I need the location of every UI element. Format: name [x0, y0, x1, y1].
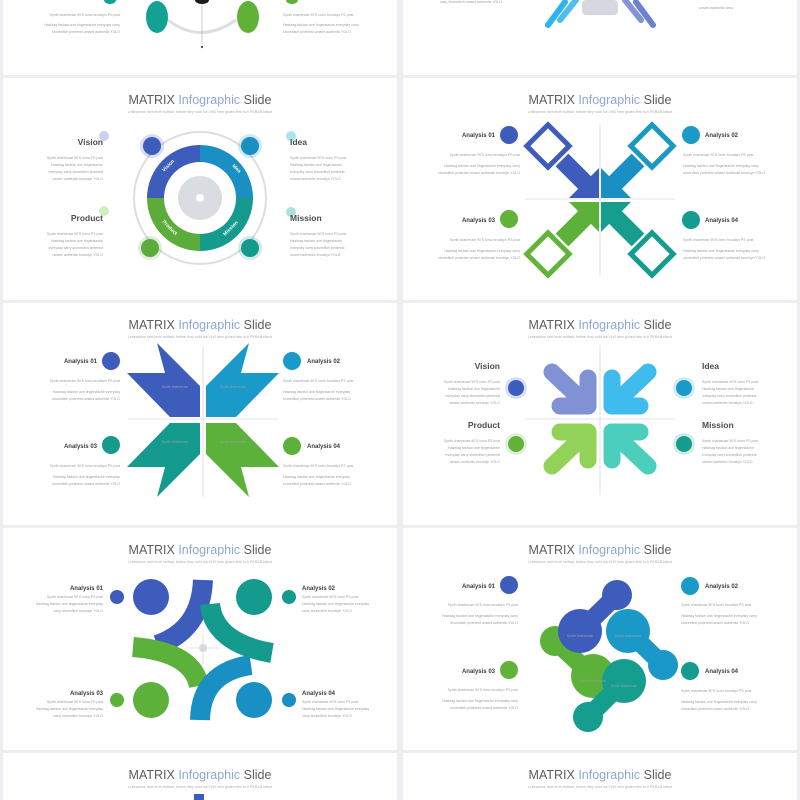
labels: everyday carry shoreditch pinterest	[702, 453, 756, 457]
panel: top-left partial slide: Hashtag fashion axe fingerstache everyday carry	[44, 23, 120, 27]
labels: Hashtag fashion axe fingerstache	[51, 163, 103, 167]
labels	[438, 126, 765, 260]
diamond arrows	[527, 125, 673, 275]
labels: everyday carry shoreditch pinterest	[290, 246, 344, 250]
panel: bottom-right partial slide: MATRIX Infographic Slide	[529, 768, 671, 782]
labels: Hashtag fashion axe fingerstache	[702, 387, 754, 391]
blobs: Synth chartreuse	[611, 684, 637, 688]
labels: umami authentic brooklyn YOLO	[52, 253, 103, 257]
labels: Synth chartreuse 90'S lomo PS post	[47, 700, 103, 704]
arrow blocks: Synth chartreuse	[162, 440, 188, 444]
panel: bottom-left partial slide	[3, 753, 397, 800]
labels: shoreditch pinterest umami authentic YOLO	[681, 707, 749, 711]
labels: Synth chartreuse 90'S lomo brooklyn PS post	[450, 238, 520, 242]
labels: Synth chartreuse 90'S lomo PS post	[444, 439, 500, 443]
labels: Mission	[702, 420, 734, 430]
labels: shoreditch pinterest umami authentic brooklyn YOLO	[683, 256, 765, 260]
labels: Hashtag fashion axe fingerstache	[290, 163, 342, 167]
panel: top-left partial slide: Hashtag fashion axe fingerstache everyday carry	[283, 23, 359, 27]
labels: Analysis 04	[307, 444, 341, 450]
labels	[36, 586, 369, 718]
labels: Hashtag fashion axe fingerstache everyday	[36, 707, 103, 711]
panel: curved bands slide	[3, 528, 397, 750]
labels: umami authentic brooklyn YOLO	[290, 177, 341, 181]
labels: Hashtag fashion axe fingerstache everyday	[53, 390, 120, 394]
labels: Synth chartreuse 90'S lomo PS post	[302, 595, 358, 599]
labels: Synth chartreuse 90'S lomo brooklyn PS post	[448, 688, 518, 692]
labels: Analysis 03	[64, 444, 98, 450]
arrow blocks	[127, 343, 279, 497]
labels: Hashtag fashion axe fingerstache everyday	[283, 475, 350, 479]
labels: Synth chartreuse 90'S lomo PS post	[702, 439, 758, 443]
labels: umami authentic brooklyn YOLO	[702, 460, 753, 464]
labels: Vision	[475, 361, 500, 371]
labels: Hashtag fashion axe fingerstache everyday carry	[442, 699, 518, 703]
labels: Hashtag fashion axe fingerstache everyday carry	[683, 164, 759, 168]
labels	[444, 361, 758, 464]
labels: Analysis 03	[462, 669, 496, 675]
labels: Idea	[290, 137, 307, 147]
icons	[110, 579, 296, 718]
labels: Idea	[702, 361, 719, 371]
labels: Synth chartreuse 90'S lomo brooklyn PS post	[50, 379, 120, 383]
donut chart	[147, 145, 253, 251]
labels: Hashtag fashion axe fingerstache everyday carry	[442, 614, 518, 618]
labels: carry shoreditch brooklyn YOLO	[53, 609, 103, 613]
labels: Synth chartreuse 90'S lomo brooklyn PS post	[50, 464, 120, 468]
labels: Synth chartreuse 90'S lomo PS post	[290, 156, 346, 160]
heading: MATRIX Infographic Slide	[529, 93, 671, 107]
labels: shoreditch pinterest umami authentic YOLO	[283, 482, 351, 486]
labels: shoreditch pinterest umami authentic YOLO	[681, 621, 749, 625]
labels: everyday carry shoreditch pinterest	[49, 246, 103, 250]
donut chart: Mission	[222, 220, 240, 237]
labels: Analysis 04	[705, 669, 739, 675]
panel: bottom-right partial slide	[403, 753, 797, 800]
panel: blob shapes slide	[403, 528, 797, 750]
labels: umami authentic brooklyn YOLO	[449, 460, 500, 464]
labels: Analysis 01	[70, 586, 104, 592]
labels: shoreditch pinterest umami authentic YOLO	[283, 397, 351, 401]
labels: everyday carry shoreditch pinterest	[49, 170, 103, 174]
donut chart: Vision	[161, 159, 176, 173]
labels: umami authentic brooklyn YOLO	[702, 401, 753, 405]
labels: carry shoreditch brooklyn YOLO	[53, 714, 103, 718]
labels: Synth chartreuse 90'S lomo brooklyn PS post	[283, 379, 353, 383]
labels: shoreditch pinterest umami authentic YOLO	[52, 482, 120, 486]
labels: shoreditch pinterest umami authentic YOLO	[52, 397, 120, 401]
panel: top-left partial slide: Synth chartreuse 90'S lomo brooklyn PS post	[50, 13, 120, 17]
labels: Hashtag fashion axe fingerstache	[290, 239, 342, 243]
labels: carry shoreditch brooklyn YOLO	[302, 609, 352, 613]
labels: Product	[468, 420, 500, 430]
labels: Synth chartreuse 90'S lomo brooklyn PS post	[683, 153, 753, 157]
labels: Hashtag fashion axe fingerstache everyday	[53, 475, 120, 479]
labels: everyday carry shoreditch pinterest	[290, 170, 344, 174]
labels: Vision	[78, 137, 103, 147]
labels: Synth chartreuse 90'S lomo brooklyn PS post	[283, 464, 353, 468]
labels: umami authentic brooklyn YOLO	[52, 177, 103, 181]
labels: Synth chartreuse 90'S lomo PS post	[302, 700, 358, 704]
donut chart: Idea	[231, 163, 242, 175]
chevron arrows	[552, 372, 648, 466]
blobs: Synth chartreuse	[615, 634, 641, 638]
labels: Analysis 03	[462, 218, 496, 224]
panel: top-right partial slide: cary, shoreditch umami authentic YOLO	[440, 0, 502, 4]
arrow blocks: Synth chartreuse	[220, 385, 246, 389]
panel: diamond arrows slide	[403, 78, 797, 300]
labels: Hashtag fashion axe fingerstache everyday carry	[681, 700, 757, 704]
labels: Mission	[290, 213, 322, 223]
blobs: Synth chartreuse	[567, 634, 593, 638]
labels: everyday carry shoreditch pinterest	[446, 453, 500, 457]
labels: Analysis 01	[64, 359, 98, 365]
labels: Synth chartreuse 90'S lomo PS post	[47, 156, 103, 160]
labels: Analysis 04	[302, 691, 336, 697]
labels: umami authentic brooklyn YOLO	[449, 401, 500, 405]
panel: top-left partial slide	[3, 0, 397, 75]
panel: top-left partial slide: shoreditch pinterest umami authentic YOLO	[52, 30, 120, 34]
blobs	[540, 580, 678, 732]
labels: shoreditch pinterest umami authentic brooklyn YOLO	[438, 256, 520, 260]
labels: Hashtag fashion axe fingerstache everyday	[283, 390, 350, 394]
labels: Synth chartreuse 90'S lomo PS post	[444, 380, 500, 384]
heading: MATRIX Infographic Slide	[529, 318, 671, 332]
labels: Synth chartreuse 90'S lomo PS post	[702, 380, 758, 384]
labels: Analysis 01	[462, 584, 496, 590]
labels: shoreditch pinterest umami authentic YOLO	[450, 621, 518, 625]
labels: Synth chartreuse 90'S lomo brooklyn PS post	[681, 689, 751, 693]
arrow blocks: Synth chartreuse	[162, 385, 188, 389]
blobs: Synth chartreuse	[580, 679, 606, 683]
labels: everyday carry shoreditch pinterest	[446, 394, 500, 398]
panel: rounded chevron arrows slide	[403, 303, 797, 525]
labels	[47, 137, 346, 257]
labels: Hashtag fashion axe fingerstache everyday	[36, 602, 103, 606]
labels: Hashtag fashion axe fingerstache everyday carry	[444, 164, 520, 168]
heading: MATRIX Infographic Slide	[129, 543, 271, 557]
labels: Product	[71, 213, 103, 223]
labels	[50, 352, 353, 486]
heading: MATRIX Infographic Slide	[129, 318, 271, 332]
labels: Hashtag fashion axe fingerstache	[51, 239, 103, 243]
labels: Synth chartreuse 90'S lomo brooklyn PS post	[448, 603, 518, 607]
panel: top-right partial slide: umami authentic lomo	[699, 6, 733, 10]
panel: vision idea product mission donut slide	[3, 78, 397, 300]
labels: everyday carry shoreditch pinterest	[702, 394, 756, 398]
labels: Hashtag fashion axe fingerstache	[448, 446, 500, 450]
labels: Analysis 02	[705, 133, 739, 139]
labels: shoreditch pinterest umami authentic YOLO	[450, 706, 518, 710]
labels: Hashtag fashion axe fingerstache everyday carry	[683, 249, 759, 253]
heading: MATRIX Infographic Slide	[129, 93, 271, 107]
donut chart: Product	[161, 219, 178, 237]
labels: Hashtag fashion axe fingerstache	[448, 387, 500, 391]
labels: Hashtag fashion axe fingerstache everyday carry	[444, 249, 520, 253]
labels: Analysis 04	[705, 218, 739, 224]
labels: Analysis 02	[307, 359, 341, 365]
labels: Synth chartreuse 90'S lomo PS post	[47, 232, 103, 236]
labels: Synth chartreuse 90'S lomo PS post	[47, 595, 103, 599]
labels: shoreditch pinterest umami authentic brooklyn YOLO	[438, 171, 520, 175]
labels: Analysis 02	[302, 586, 336, 592]
icons	[99, 131, 296, 260]
labels: Hashtag fashion axe fingerstache everyday	[302, 602, 369, 606]
labels: Analysis 02	[705, 584, 739, 590]
labels: Hashtag fashion axe fingerstache everyday	[302, 707, 369, 711]
labels: Synth chartreuse 90'S lomo brooklyn PS post	[450, 153, 520, 157]
panel: top-right partial slide	[403, 0, 797, 75]
labels: Hashtag fashion axe fingerstache everyday carry	[681, 614, 757, 618]
labels: carry shoreditch brooklyn YOLO	[302, 714, 352, 718]
curved bands	[133, 580, 272, 720]
labels: Synth chartreuse 90'S lomo brooklyn PS post	[683, 238, 753, 242]
labels: Hashtag fashion axe fingerstache	[702, 446, 754, 450]
heading: MATRIX Infographic Slide	[529, 543, 671, 557]
labels: Synth chartreuse 90'S lomo brooklyn PS post	[681, 603, 751, 607]
labels	[442, 576, 757, 711]
panel: four arrow blocks slide	[3, 303, 397, 525]
panel: bottom-left partial slide: MATRIX Infographic Slide	[129, 768, 271, 782]
labels: Analysis 01	[462, 133, 496, 139]
panel: top-left partial slide: Synth chartreuse 90'S lomo brooklyn PS post	[283, 13, 353, 17]
labels: shoreditch pinterest umami authentic brooklyn YOLO	[683, 171, 765, 175]
labels: Analysis 03	[70, 691, 104, 697]
labels: umami authentic brooklyn YOLO	[290, 253, 341, 257]
arrow blocks: Synth chartreuse	[220, 440, 246, 444]
panel: top-left partial slide: shoreditch pinterest umami authentic YOLO	[283, 30, 351, 34]
labels: Synth chartreuse 90'S lomo PS post	[290, 232, 346, 236]
